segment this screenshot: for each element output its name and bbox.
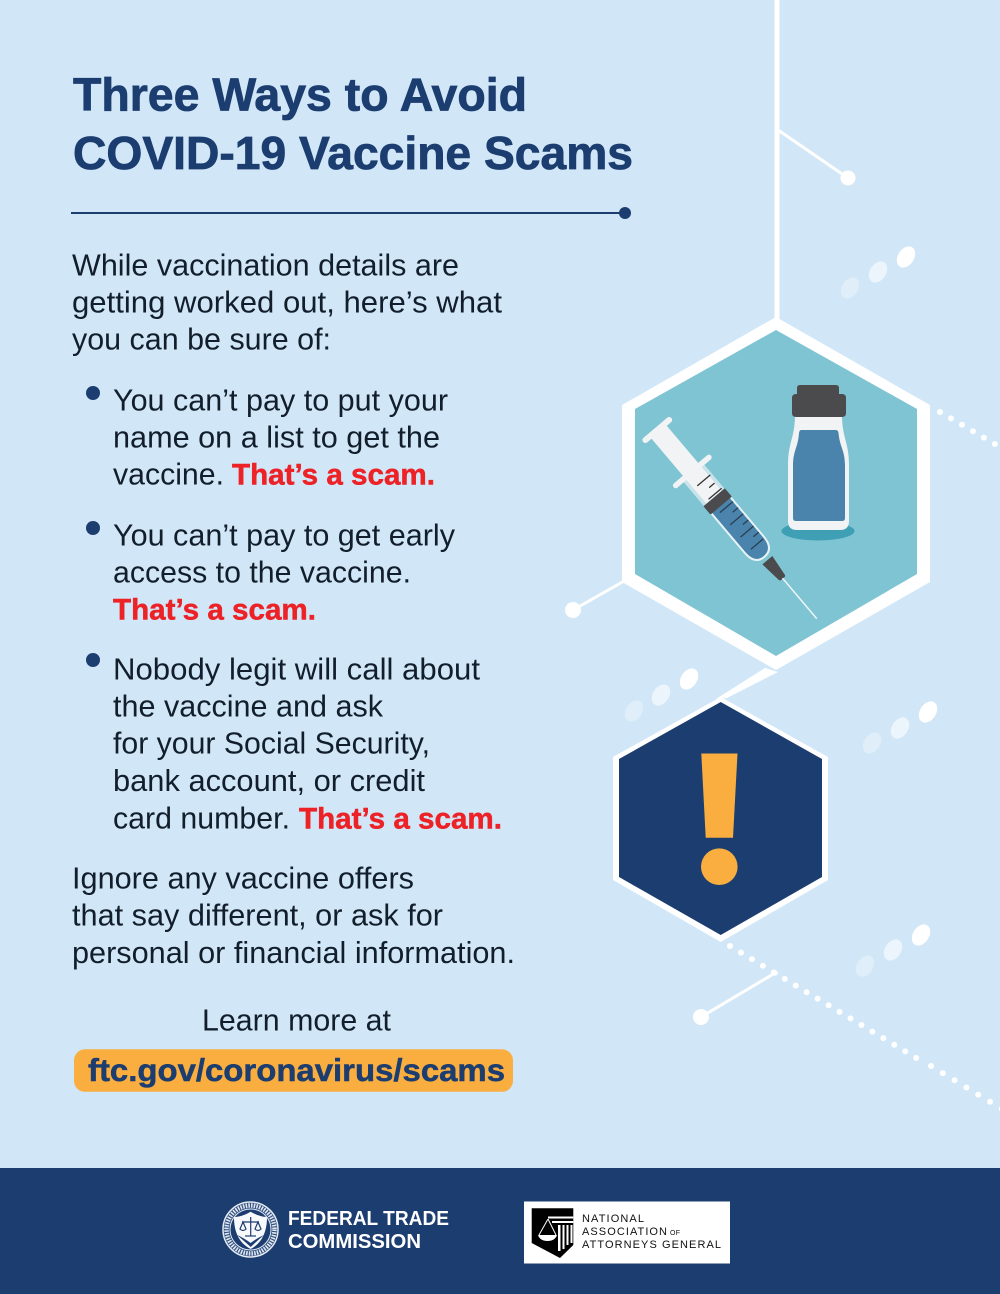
closing text bbox=[72, 862, 515, 970]
background network decoration bbox=[565, 0, 1000, 1109]
bullet 3: That’s a scam. bbox=[299, 802, 502, 836]
bullet 3: bank account, or credit bbox=[113, 764, 426, 798]
bullet 1: name on a list to get the bbox=[113, 420, 440, 454]
bullet 3: Nobody legit will call about bbox=[113, 652, 481, 686]
bullet 3 bbox=[86, 652, 502, 836]
link pill: ftc.gov/coronavirus/scams bbox=[88, 1052, 505, 1088]
title divider bbox=[71, 207, 631, 219]
icon: NAAG shield bbox=[532, 1208, 573, 1258]
bullet 3: card number. bbox=[113, 802, 290, 836]
NAAG wordmark: ASSOCIATION bbox=[582, 1226, 667, 1238]
bullet 2: access to the vaccine. bbox=[113, 556, 411, 590]
title bbox=[73, 68, 633, 179]
FTC wordmark: FEDERAL TRADE bbox=[288, 1208, 449, 1230]
icon: exclamation mark bbox=[701, 754, 738, 885]
intro text: While vaccination details are bbox=[72, 248, 459, 282]
icon: FTC seal bbox=[223, 1202, 278, 1257]
footer band bbox=[0, 1168, 1000, 1294]
NAAG logo box bbox=[524, 1202, 730, 1264]
learn more label: Learn more at bbox=[202, 1004, 392, 1038]
bullet 2 bbox=[86, 518, 456, 626]
FTC wordmark: COMMISSION bbox=[288, 1231, 421, 1253]
closing text: Ignore any vaccine offers bbox=[72, 862, 414, 896]
panel: vaccine hexagon bbox=[622, 317, 930, 670]
NAAG wordmark: ATTORNEYS GENERAL bbox=[582, 1239, 721, 1251]
closing text: that say different, or ask for bbox=[72, 898, 443, 932]
bullet 2: You can’t pay to get early bbox=[113, 518, 456, 552]
bullet 3: the vaccine and ask bbox=[113, 690, 384, 724]
icon: vaccine bottle bbox=[782, 385, 854, 540]
bullet 2: That’s a scam. bbox=[113, 594, 316, 626]
FTC wordmark bbox=[288, 1208, 449, 1253]
NAAG wordmark: OF bbox=[670, 1230, 680, 1237]
NAAG wordmark bbox=[582, 1213, 721, 1251]
intro text: getting worked out, here’s what bbox=[72, 286, 503, 320]
title: COVID-19 Vaccine Scams bbox=[73, 127, 633, 179]
closing text: personal or financial information. bbox=[72, 936, 515, 970]
NAAG wordmark: NATIONAL bbox=[582, 1213, 644, 1225]
bullet 3: for your Social Security, bbox=[113, 726, 430, 760]
bullet 1: You can’t pay to put your bbox=[113, 384, 448, 418]
panel: warning hexagon bbox=[613, 697, 828, 942]
intro text: you can be sure of: bbox=[72, 322, 331, 356]
icon: syringe bbox=[637, 412, 835, 634]
intro text bbox=[72, 248, 503, 356]
title: Three Ways to Avoid bbox=[73, 68, 527, 120]
bullet 1 bbox=[86, 384, 448, 492]
bullet 1: That’s a scam. bbox=[232, 458, 435, 492]
bullet 1: vaccine. bbox=[113, 458, 224, 492]
